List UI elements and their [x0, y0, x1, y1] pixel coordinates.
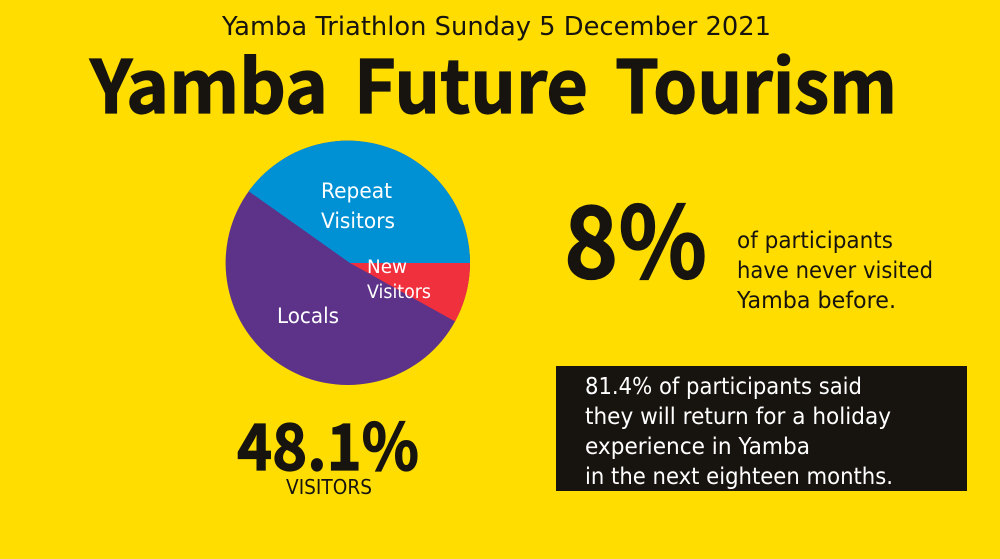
title: Tourism: [615, 29, 897, 135]
callout: return for a holiday: 81.4% of participants said: [585, 374, 862, 400]
label: new visitors: New: [367, 257, 407, 278]
callout: return for a holiday: [556, 366, 967, 491]
stat: 8%: 8%: [564, 163, 707, 307]
text block: never visited: of participants: [737, 228, 893, 254]
label: locals: Locals: [277, 304, 339, 328]
text block: never visited: Yamba before.: [736, 288, 896, 314]
stat: 48.1% visitors: 48.1%: [237, 397, 419, 489]
title: Yamba: [89, 29, 328, 135]
callout: return for a holiday: experience in Yamba: [585, 434, 810, 460]
slice: repeat visitors: [248, 140, 470, 263]
pie chart: visitor types: [220, 130, 480, 385]
subtitle: Yamba Triathlon Sunday 5 December 2021: [221, 12, 771, 42]
text block: never visited: have never visited: [737, 258, 933, 284]
label: repeat visitors: Visitors: [321, 209, 395, 233]
callout: return for a holiday: in the next eighteen months.: [585, 464, 893, 490]
slice: locals: [226, 141, 470, 385]
stat: 48.1% visitors: VISITORS: [286, 475, 372, 499]
label: new visitors: Visitors: [367, 282, 431, 303]
slice: new visitors: [350, 263, 470, 322]
label: repeat visitors: Repeat: [321, 179, 392, 203]
callout: return for a holiday: they will return for a holiday: [585, 404, 891, 430]
title: Future: [354, 29, 588, 135]
